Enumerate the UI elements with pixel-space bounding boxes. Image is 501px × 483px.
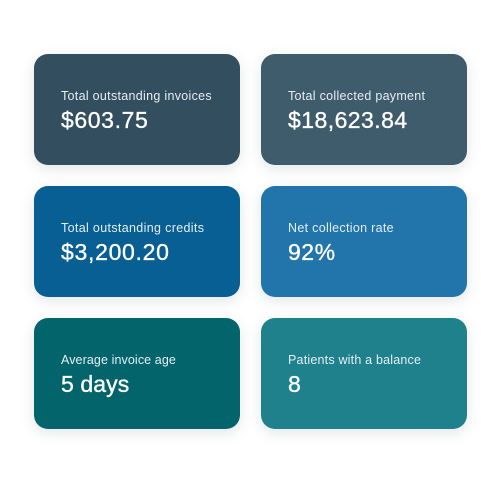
panel: total outstanding credits [34,186,240,297]
label: average invoice age: Average invoice age [61,352,176,366]
panel: average invoice age [34,318,240,429]
value: total collected payment: $18,623.84 [288,107,408,133]
label: total outstanding credits: Total outstanding credits [61,220,204,234]
value: total outstanding invoices: $603.75 [61,107,148,133]
panel: total collected payment [261,54,467,165]
panel: total outstanding invoices [34,54,240,165]
label: net collection rate: Net collection rate [288,220,394,234]
panel: net collection rate [261,186,467,297]
panel: patients with a balance [261,318,467,429]
value: average invoice age: 5 days [61,371,129,397]
label: patients with a balance: Patients with a balance [288,352,421,366]
label: total outstanding invoices: Total outstanding invoices [61,88,212,102]
value: patients with a balance: 8 [288,371,301,397]
label: total collected payment: Total collected payment [288,88,425,102]
value: total outstanding credits: $3,200.20 [61,239,170,265]
value: net collection rate: 92% [288,239,336,265]
